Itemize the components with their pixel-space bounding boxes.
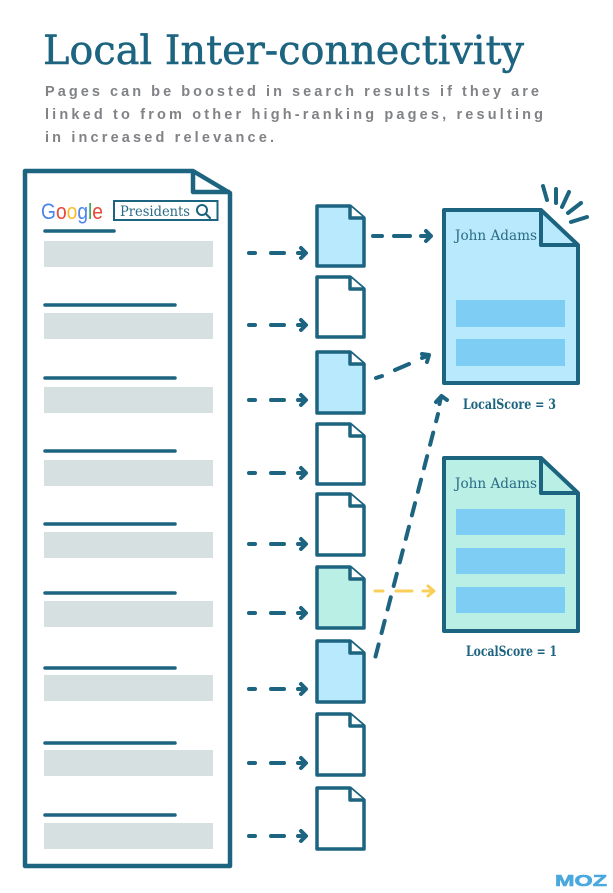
panel: John Adams page, LocalScore 3: John Adams [453,228,537,244]
result rows [44,231,213,849]
logo: Moz: MOZ [555,873,608,890]
google logo: Google [41,199,103,224]
arrow: seventh page to LocalScore 3 page [376,396,447,656]
panel: John Adams page, LocalScore 3 [444,210,578,383]
page outline [25,171,230,866]
linked pages column [317,206,364,849]
title: Local Inter-connectivity [43,28,524,74]
subtitle: linked to from other high-ranking pages, resulting [45,107,543,123]
arrow: third page to LocalScore 3 page [376,354,429,378]
subtitle: in increased relevance. [45,130,274,146]
label: LocalScore 3: LocalScore = 3 [463,397,556,413]
arrow: top page to LocalScore 3 page [373,231,431,241]
panel: John Adams page, LocalScore 1 [444,458,578,631]
panel: John Adams page, LocalScore 1: John Adams [453,476,537,492]
subtitle: Pages can be boosted in search results if they are [45,84,539,100]
search box [114,201,218,220]
arrow: yellow page to LocalScore 1 page [375,586,434,596]
icon: emphasis rays [543,186,587,222]
search box: Presidents [120,204,190,220]
arrows: results to linked pages [249,248,306,841]
label: LocalScore 1: LocalScore = 1 [466,644,557,660]
panel: search results page [25,171,230,866]
subtitle [45,84,543,146]
